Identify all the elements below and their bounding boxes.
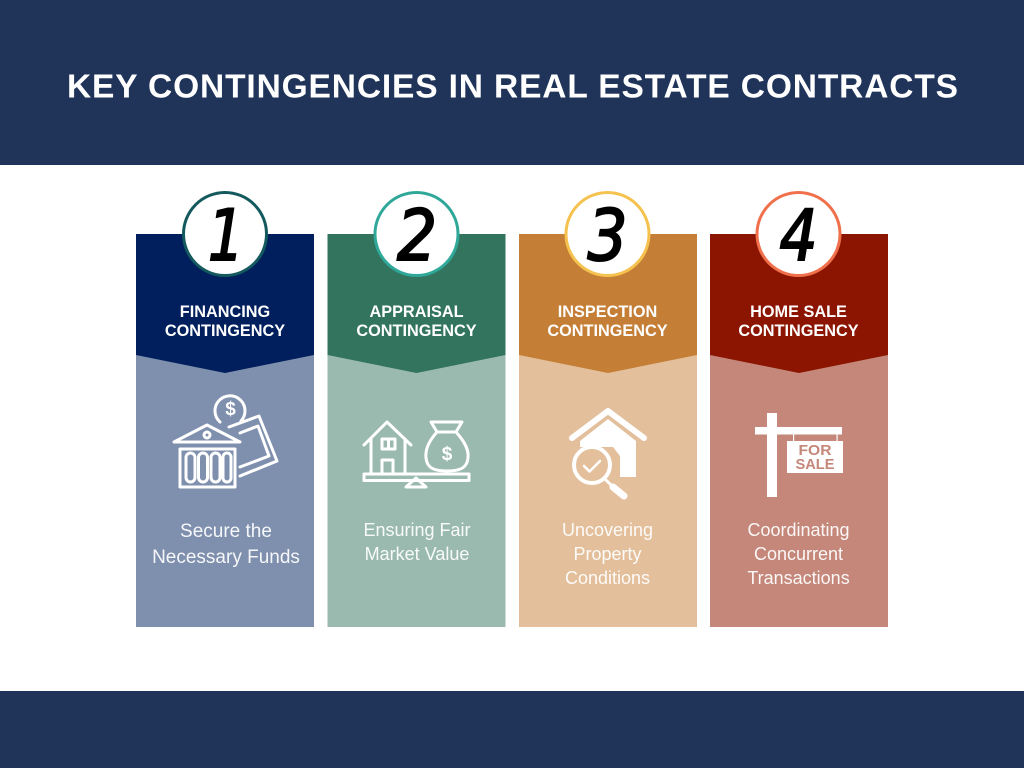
heading: HOME SALE xyxy=(750,303,847,321)
description: Market Value xyxy=(365,544,469,564)
description: Conditions xyxy=(565,568,650,588)
number badge 4: 4 xyxy=(780,195,818,277)
panel: appraisal contingency xyxy=(328,192,506,627)
icon: for sale sign: SALE xyxy=(796,456,834,473)
description: Concurrent xyxy=(754,544,843,564)
header band xyxy=(0,0,1024,165)
description: Secure the xyxy=(180,521,272,542)
heading: INSPECTION xyxy=(558,303,657,321)
panel: inspection contingency xyxy=(519,192,697,627)
heading: FINANCING xyxy=(180,303,270,321)
panel header xyxy=(710,234,888,373)
icon: house with magnifying glass xyxy=(572,411,644,496)
heading: CONTINGENCY xyxy=(165,322,285,340)
heading: CONTINGENCY xyxy=(738,322,859,340)
panel body xyxy=(328,340,506,627)
icon: for sale sign: FOR xyxy=(798,442,832,459)
number badge 3: 3 xyxy=(588,195,628,277)
heading: CONTINGENCY xyxy=(547,322,668,340)
number badge 3 xyxy=(566,192,649,277)
panel header xyxy=(328,234,506,373)
panel header xyxy=(136,234,314,373)
icon: bank and money: $ xyxy=(225,399,236,420)
description: Coordinating xyxy=(747,520,850,540)
icon: for sale sign xyxy=(755,413,843,497)
icon: house and money bag on scale xyxy=(364,422,469,487)
description: Property xyxy=(573,544,642,564)
number badge 2: 2 xyxy=(397,195,437,277)
panel body xyxy=(136,340,314,627)
number badge 2 xyxy=(375,192,458,277)
icon: house and money bag on scale: $ xyxy=(442,444,453,465)
number badge 4 xyxy=(757,192,840,277)
panel: financing contingency xyxy=(136,192,314,627)
number badge 1 xyxy=(184,192,266,277)
description: Transactions xyxy=(747,568,850,588)
panel: home sale contingency xyxy=(710,192,888,627)
description: Necessary Funds xyxy=(152,547,300,568)
panel header xyxy=(519,234,697,373)
description: Uncovering xyxy=(562,520,653,540)
heading: APPRAISAL xyxy=(369,303,464,321)
icon: bank and money xyxy=(174,396,277,487)
title: KEY CONTINGENCIES IN REAL ESTATE CONTRACTS xyxy=(67,68,958,106)
panel body xyxy=(519,340,697,627)
heading: CONTINGENCY xyxy=(356,322,477,340)
panel body xyxy=(710,340,888,627)
number badge 1: 1 xyxy=(208,195,244,277)
footer band xyxy=(0,691,1024,768)
description: Ensuring Fair xyxy=(363,520,471,540)
